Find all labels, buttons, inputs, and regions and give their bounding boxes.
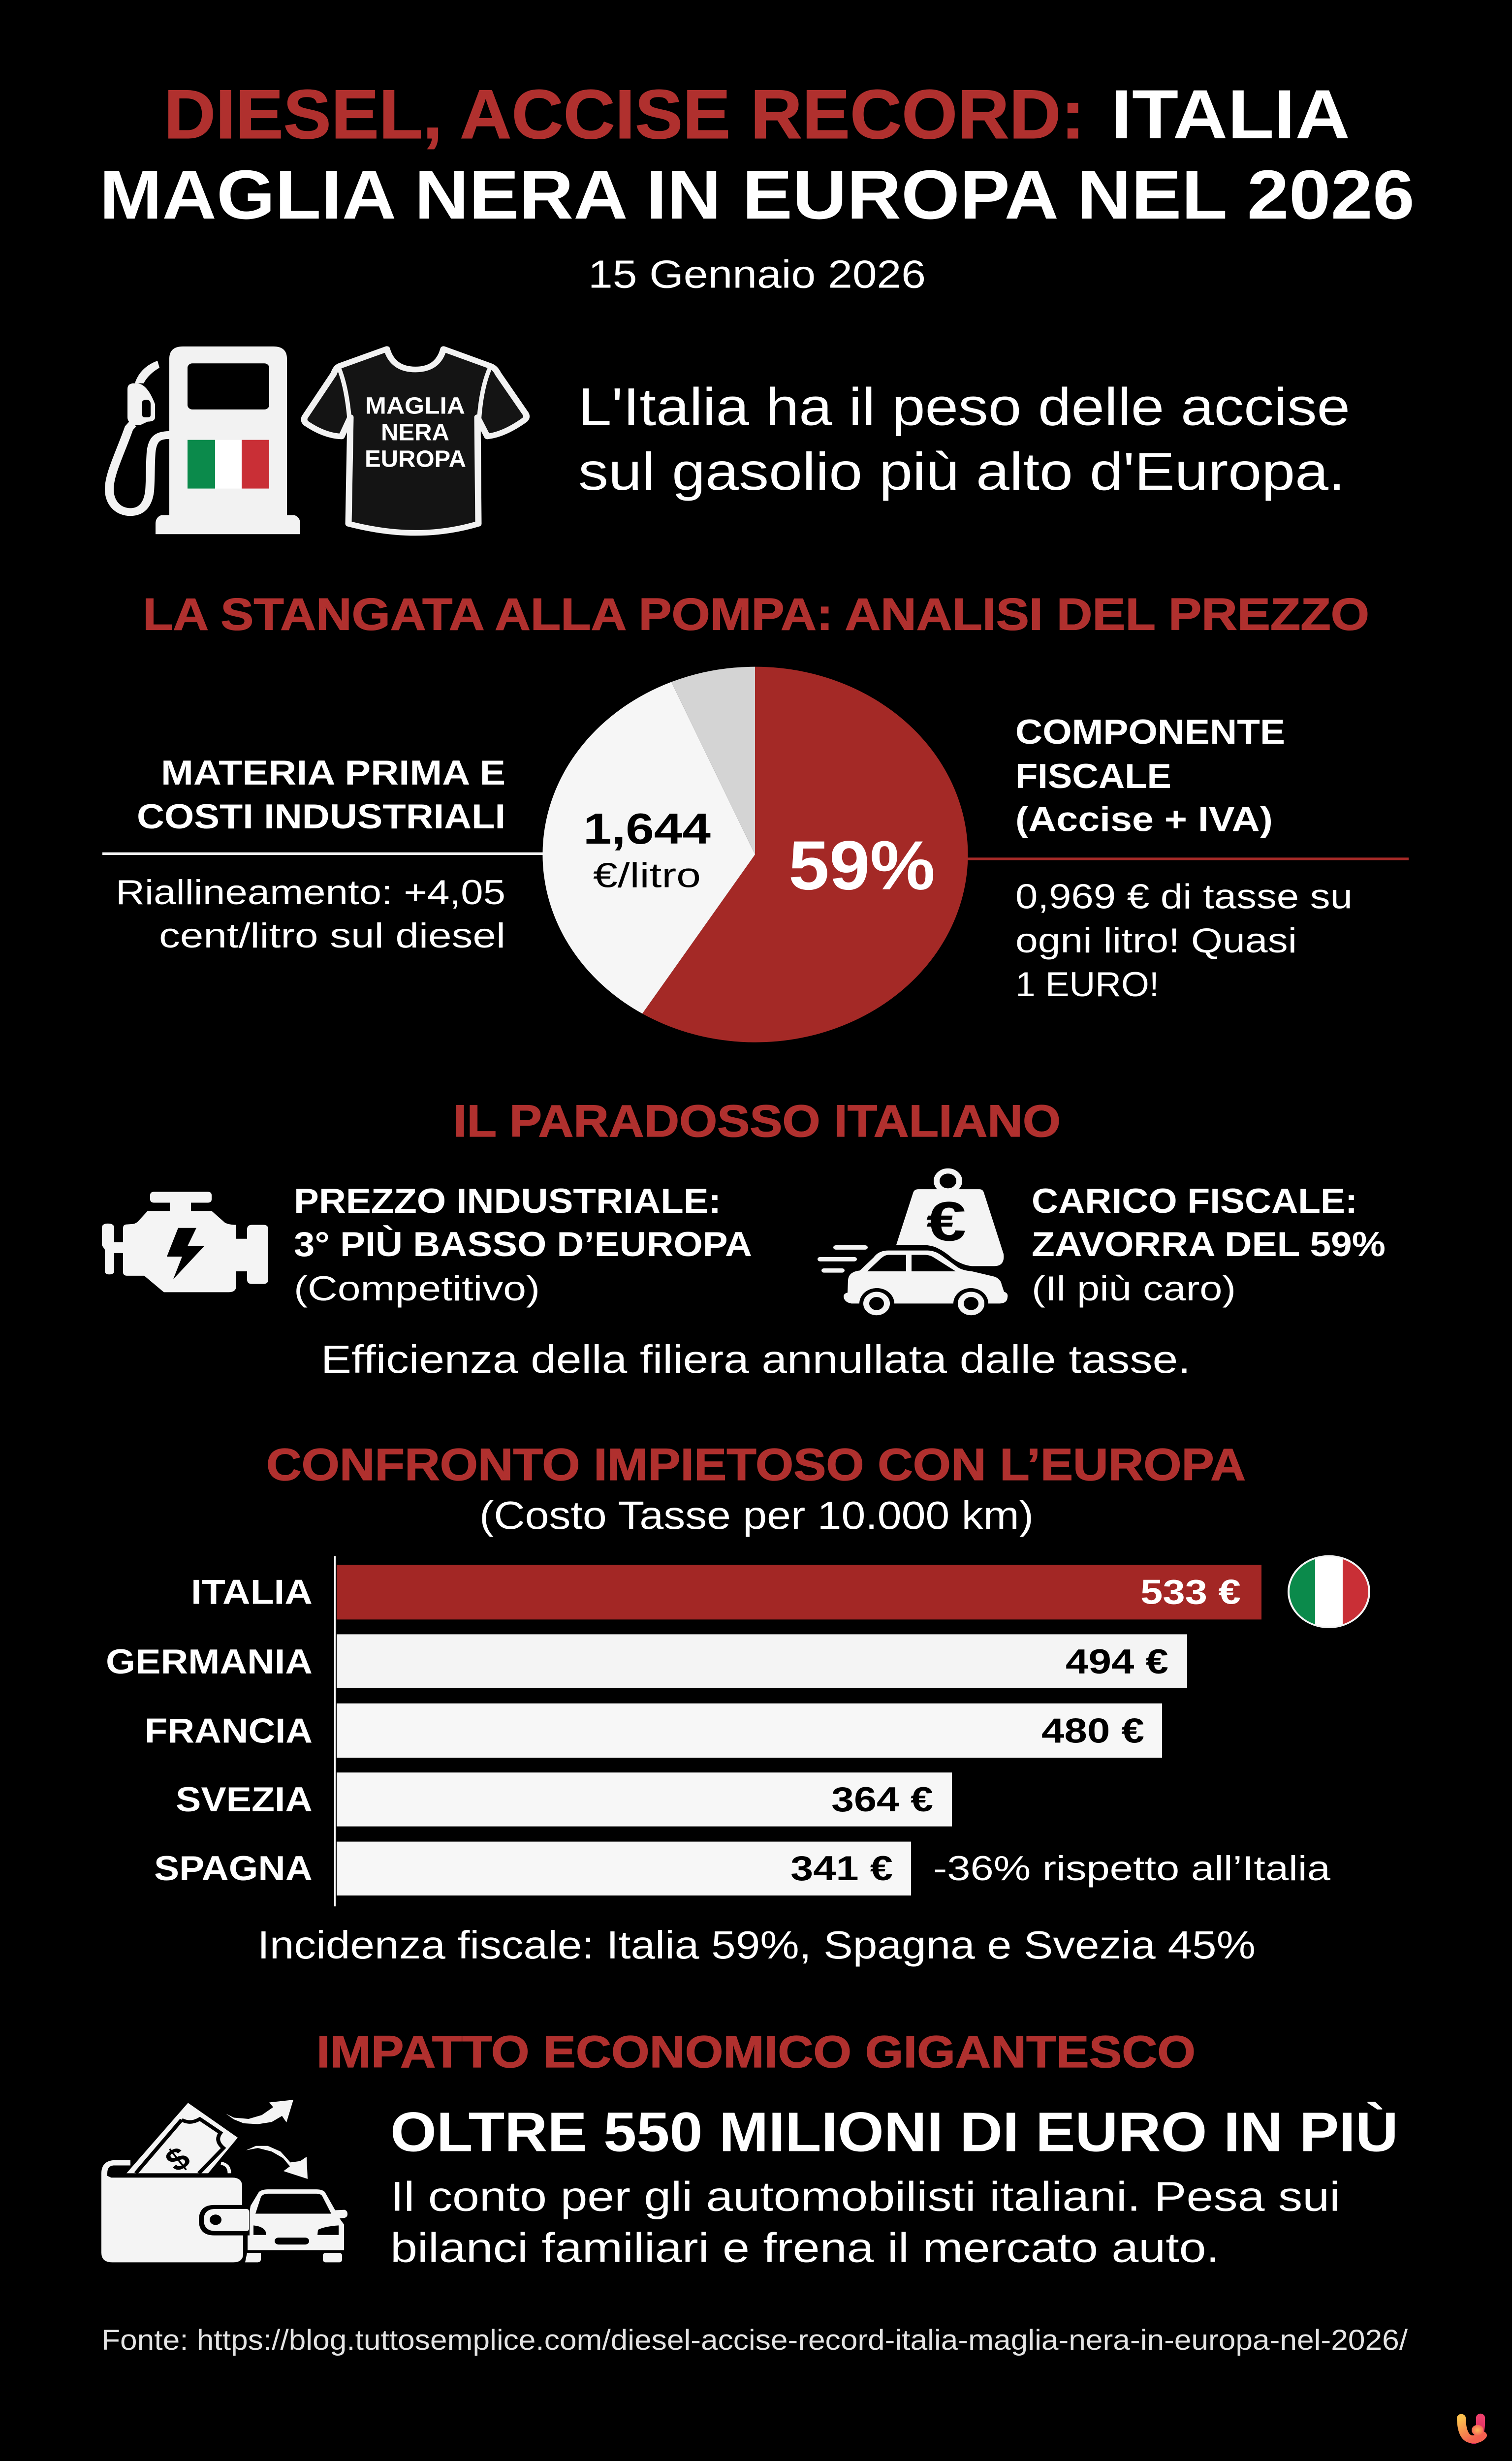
text: il conto: Il conto per gli automobilisti italiani. Pesa sui <box>390 2174 1340 2220</box>
pie chart <box>542 667 968 1042</box>
icon: wallet, banknote and car <box>101 2100 347 2262</box>
label: componente fiscale: 0,969 € di tasse su <box>1015 877 1353 916</box>
title: DIESEL, ACCISE RECORD: <box>164 75 1085 153</box>
bar: Spagna: SPAGNA <box>154 1849 313 1888</box>
label: componente fiscale: COMPONENTE <box>1015 712 1285 751</box>
pie chart: 1,644 <box>583 804 711 853</box>
icon: car with euro weight <box>818 1171 1008 1313</box>
label: componente fiscale: ogni litro! Quasi <box>1015 921 1297 960</box>
fiscal incidence note: Incidenza fiscale: Italia 59%, Spagna e Svezia 45% <box>257 1923 1256 1967</box>
title: MAGLIA NERA IN EUROPA NEL 2026 <box>99 156 1415 233</box>
bar: Italia <box>191 1565 1261 1619</box>
label: materia prima: MATERIA PRIMA E <box>161 753 505 792</box>
bar: Francia: FRANCIA <box>145 1711 313 1750</box>
pie chart: €/litro <box>593 856 701 894</box>
subtitle: (Costo Tasse per 10.000 km) <box>479 1493 1034 1537</box>
text: prezzo industriale: PREZZO INDUSTRIALE: <box>294 1181 721 1220</box>
bar: Svezia <box>176 1772 952 1827</box>
icon: black jersey: NERA <box>381 419 449 445</box>
bar: Francia <box>145 1704 1162 1758</box>
label: materia prima <box>116 753 505 955</box>
text: carico fiscale <box>1032 1181 1386 1308</box>
text: il conto: bilanci familiari e frena il mercato auto. <box>390 2225 1220 2271</box>
efficiency statement: Efficienza della filiera annullata dalle tasse. <box>321 1337 1191 1381</box>
label: materia prima: cent/litro sul diesel <box>159 916 505 955</box>
title: ITALIA <box>1111 75 1350 153</box>
icon: wallet, banknote and car: $ <box>158 2140 197 2178</box>
heading: impatto: IMPATTO ECONOMICO GIGANTESCO <box>316 2026 1196 2077</box>
intro text: sul gasolio più alto d'Europa. <box>578 442 1345 502</box>
date: 15 Gennaio 2026 <box>588 252 926 296</box>
icon: logo <box>1461 2418 1483 2440</box>
bar: Spagna: 341 € <box>790 1849 893 1888</box>
icon: black jersey: MAGLIA <box>365 392 465 419</box>
icon: black jersey <box>304 349 527 533</box>
title <box>99 75 1415 233</box>
intro text: L'Italia ha il peso delle accise <box>578 378 1350 437</box>
bar: Italia: 533 € <box>1140 1573 1241 1611</box>
label: componente fiscale: FISCALE <box>1015 757 1171 795</box>
heading: confronto: CONFRONTO IMPIETOSO CON L’EUROPA <box>266 1439 1246 1490</box>
icon: Italian flag circle <box>1288 1555 1370 1628</box>
headline: oltre 550 milioni: OLTRE 550 MILIONI DI EURO IN PIÙ <box>390 2101 1398 2163</box>
heading: la stangata: LA STANGATA ALLA POMPA: ANALISI DEL PREZZO <box>143 589 1369 639</box>
text: prezzo industriale: (Competitivo) <box>294 1269 540 1308</box>
connector line right <box>965 857 1409 860</box>
text: il conto <box>390 2174 1340 2271</box>
text: carico fiscale: CARICO FISCALE: <box>1032 1181 1357 1220</box>
annotation: -36%: -36% rispetto all’Italia <box>933 1849 1330 1888</box>
bar: Germania <box>106 1634 1187 1688</box>
bar chart <box>106 1556 1330 1906</box>
bar: Spagna <box>154 1842 911 1895</box>
icon: engine <box>102 1192 268 1292</box>
icon: fuel pump with Italian flag <box>109 347 300 534</box>
label: componente fiscale: 1 EURO! <box>1015 965 1159 1004</box>
label: componente fiscale <box>1015 712 1353 1004</box>
source: Fonte: https://blog.tuttosemplice.com/diesel-accise-record-italia-maglia-nera-in-europa-nel-2026/ <box>101 2324 1408 2356</box>
icon: car with euro weight: € <box>926 1190 966 1253</box>
label: materia prima: Riallineamento: +4,05 <box>116 873 505 912</box>
bar: Germania: 494 € <box>1066 1642 1168 1681</box>
label: componente fiscale: (Accise + IVA) <box>1015 800 1273 838</box>
bar: Svezia: SVEZIA <box>176 1780 313 1819</box>
text: carico fiscale: (Il più caro) <box>1032 1269 1236 1308</box>
text: carico fiscale: ZAVORRA DEL 59% <box>1032 1225 1386 1263</box>
bar: Francia: 480 € <box>1041 1711 1144 1750</box>
text: prezzo industriale: 3° PIÙ BASSO D’EUROPA <box>294 1225 752 1263</box>
heading: il paradosso: IL PARADOSSO ITALIANO <box>453 1096 1061 1146</box>
connector line left <box>102 852 545 855</box>
icon: black jersey: EUROPA <box>365 445 466 472</box>
label: materia prima: COSTI INDUSTRIALI <box>137 797 505 836</box>
intro text <box>578 378 1350 502</box>
pie chart: 59% <box>788 826 935 904</box>
bar: Italia: ITALIA <box>191 1573 313 1611</box>
bar: Germania: GERMANIA <box>106 1642 313 1681</box>
bar: Svezia: 364 € <box>831 1780 933 1819</box>
text: prezzo industriale <box>294 1181 752 1308</box>
